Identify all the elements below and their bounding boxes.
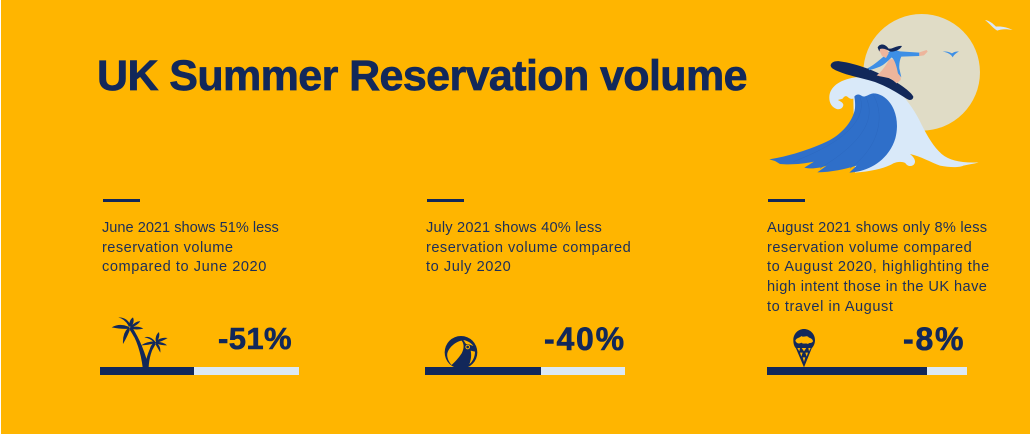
text: August: August 2021 shows only 8% less (767, 220, 987, 236)
text: June (102, 220, 279, 275)
text: June: June 2021 shows 51% less (102, 220, 279, 236)
value: June: -51% (218, 321, 292, 356)
rule: July (427, 199, 464, 202)
icon: palm trees (112, 317, 168, 367)
rule: June (103, 199, 140, 202)
progress bar: August (767, 367, 967, 375)
progress bar: July (425, 367, 625, 375)
text: July (426, 220, 631, 275)
text: July: to July 2020 (426, 259, 511, 275)
wave foam (829, 77, 979, 173)
large gull (985, 20, 1013, 31)
surfer legs (877, 59, 901, 83)
icon: ice cream (793, 329, 815, 367)
text: August: high intent those in the UK have (767, 279, 987, 295)
text: July: July 2021 shows 40% less (426, 220, 602, 236)
sun (863, 14, 980, 131)
surfer top and arms (867, 50, 919, 77)
small bird (943, 51, 959, 57)
small palm fronds (141, 332, 168, 354)
rule: August (768, 199, 805, 202)
surfer head and hair (879, 47, 889, 58)
value: July: -40% (544, 321, 626, 357)
text: August: reservation volume compared (767, 240, 972, 256)
value: August: -8% (903, 321, 965, 357)
wave streaks (793, 95, 879, 168)
text: June: compared to June 2020 (102, 259, 267, 275)
surfboard (831, 61, 913, 100)
illustration: surfer on a wave with sun (769, 14, 1013, 173)
progress bar: June (100, 367, 299, 375)
large palm fronds (112, 317, 143, 344)
text: June: reservation volume (102, 240, 233, 256)
text: August (767, 220, 990, 315)
text: August: to travel in August (767, 299, 893, 315)
palm trunks (129, 327, 149, 367)
wave body (769, 93, 897, 173)
text: July: reservation volume compared (426, 240, 631, 256)
icon: beach ball (445, 336, 477, 369)
surfer hands (919, 50, 928, 56)
text: August: to August 2020, highlighting the (767, 259, 990, 275)
title: UK Summer Reservation volume (97, 52, 747, 100)
